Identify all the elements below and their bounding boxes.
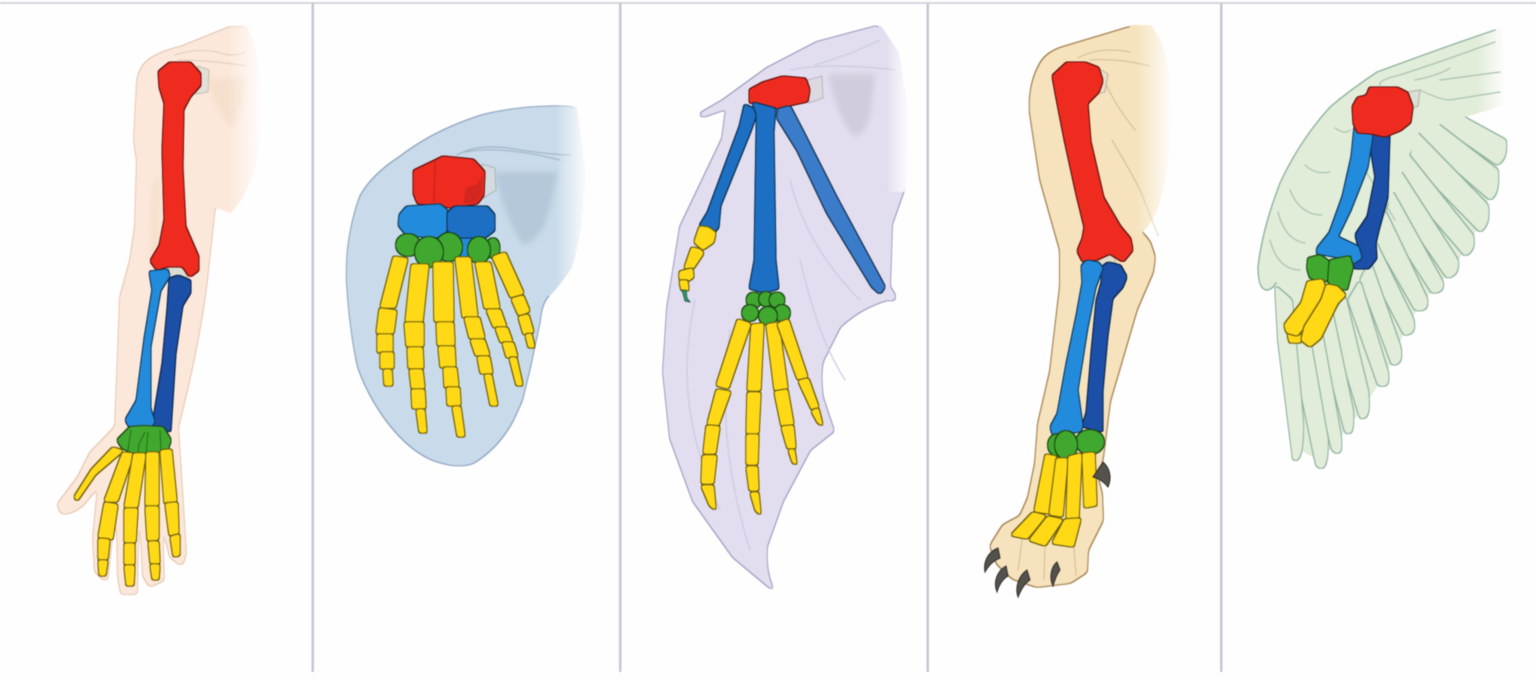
dog fade <box>1136 20 1174 234</box>
bat carpals <box>742 292 790 325</box>
bird digits <box>1285 280 1345 346</box>
dog ulna <box>1083 263 1126 431</box>
bat humerus <box>750 77 809 108</box>
whale digits <box>377 253 534 436</box>
bat outer forearm bone <box>700 105 757 233</box>
panel: bird wing <box>1258 27 1506 468</box>
flipper skin <box>347 106 584 465</box>
whale carpal backing <box>433 237 473 257</box>
whale carpals <box>396 233 500 267</box>
human carpals <box>117 426 171 454</box>
bird carpals <box>1307 255 1353 290</box>
wing shoulder shading <box>828 74 875 137</box>
human digits <box>75 448 179 585</box>
human elbow cartilage <box>168 264 187 278</box>
bat thumb <box>680 227 715 302</box>
panel: human arm <box>57 20 264 594</box>
whale radius <box>399 205 448 237</box>
human shoulder edge softener <box>217 27 261 211</box>
feather base fill <box>1276 90 1505 460</box>
dog leg fur <box>990 27 1170 587</box>
wing shoulder socket <box>808 76 823 103</box>
panel: whale flipper <box>347 100 588 466</box>
bat right bone <box>777 106 885 294</box>
bat central bone <box>750 103 778 292</box>
dog digits <box>1012 453 1096 546</box>
human shoulder socket <box>196 66 209 94</box>
panel: dog leg <box>985 20 1174 597</box>
wing covert area <box>1258 27 1506 290</box>
dog humerus <box>1053 63 1132 261</box>
human humerus <box>151 63 200 276</box>
wing covert lines <box>1270 42 1500 270</box>
bird radius <box>1317 127 1372 263</box>
dog shoulder details <box>1018 50 1158 580</box>
dog shoulder socket <box>1096 68 1108 94</box>
wing shoulder socket <box>1408 90 1420 110</box>
panel: bat wing <box>663 20 910 592</box>
human radius <box>126 270 169 427</box>
human fade <box>228 20 264 215</box>
dog fur edge softener <box>1132 27 1170 230</box>
flipper shoulder shading <box>495 172 558 245</box>
bird humerus <box>1353 88 1412 136</box>
dog carpals <box>1048 430 1104 459</box>
dog radius <box>1051 261 1102 434</box>
human arm skin <box>57 27 261 594</box>
bat digits <box>702 320 822 514</box>
wing fade <box>886 20 910 192</box>
human shoulder shading <box>150 78 247 270</box>
whale ulna <box>448 207 494 237</box>
flipper edge softener <box>549 108 584 294</box>
whale humerus <box>414 157 484 207</box>
flipper shoulder socket <box>482 164 496 198</box>
wing membrane <box>663 26 907 592</box>
human ulna <box>153 276 190 431</box>
dog elbow cartilage <box>1097 252 1116 266</box>
wing outline <box>1258 30 1495 290</box>
dog claws <box>985 462 1110 597</box>
flipper fade <box>556 100 588 300</box>
wing edge softener <box>880 28 907 185</box>
human carpal lines <box>128 430 161 453</box>
primary feathers <box>1275 90 1506 468</box>
bird ulna <box>1352 133 1389 268</box>
